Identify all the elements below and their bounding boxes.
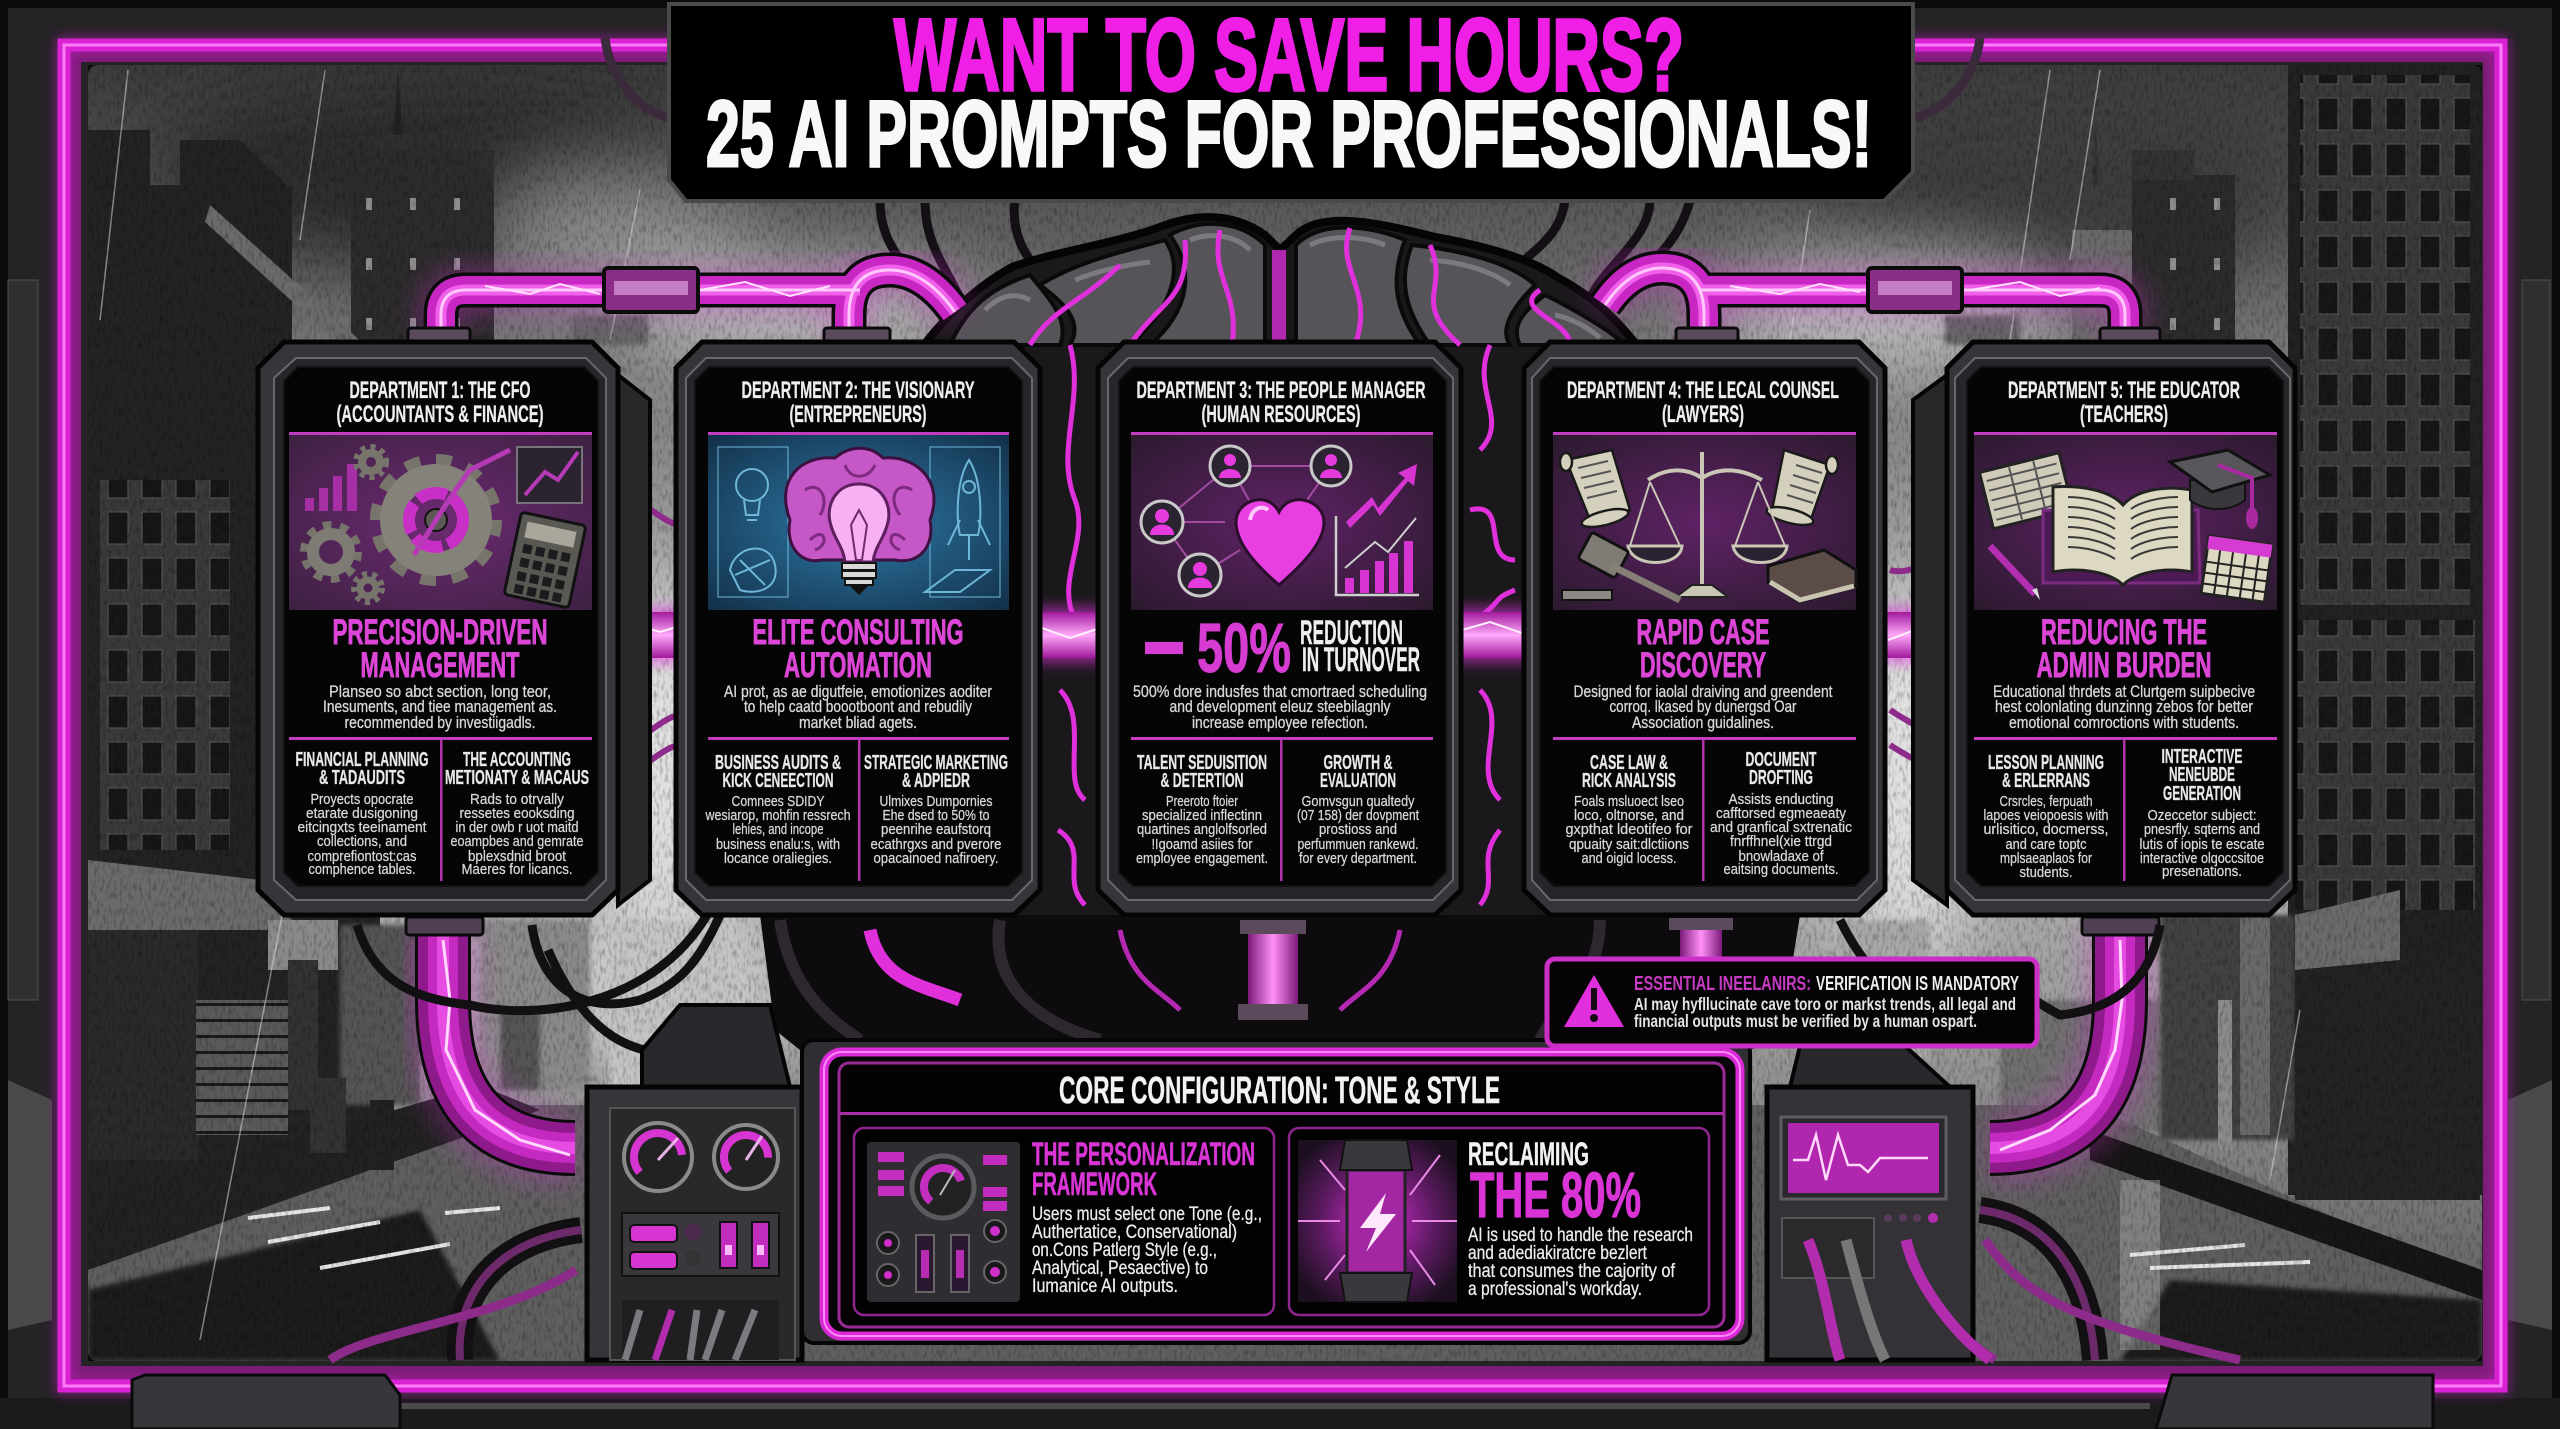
top right energy pipe [1605,268,2160,344]
panel 4 column: document drafting: bnowladaxe of [1738,849,1824,865]
panel 2 column: strategic marketing: peenrihe eaufstorq [881,822,991,838]
panel 4 column: case law: CASE LAW & [1590,752,1668,774]
panel 4 column: case law: and oigid locess. [1582,851,1676,867]
far grey buildings [340,315,2160,1130]
panel 4 frame [1524,342,1885,915]
panel 3 description: 500% dore indusfes that cmortraed scheduling [1133,683,1427,701]
panel 4 department header: DEPARTMENT 4: THE LECAL COUNSEL [1567,377,1839,404]
side energy tube [1669,918,1733,960]
panel 1 column: accounting: Maeres for licancs. [462,862,572,878]
panel 5 department header: DEPARTMENT 5: THE EDUCATOR [2008,377,2240,404]
gauges [624,1123,778,1191]
panel 4 description: Association guidalines. [1632,714,1774,732]
panel 1 department header [289,377,592,435]
panel 3 column: growth and evaluation: Gomvsgun qualtedy [1302,794,1415,810]
icon: gears, calculator and growth chart [289,435,592,610]
panel 2 column: business audits [705,752,850,867]
lower left energy pipe [406,917,575,1155]
panel 2 column: business audits: KICK CENEECTION [722,770,834,792]
panel 2 column: strategic marketing: & ADPIEDR [902,770,970,792]
right building [2160,65,2488,1200]
right skyline tower [2072,120,2235,355]
framework body: Iumanice AI outputs. [1032,1276,1178,1297]
warning callout [1547,959,2037,1046]
reclaiming body [1468,1225,1693,1300]
warning text: AI may hyfllucinate cave toro or markst trends, all legal and [1634,994,2016,1014]
panel 2 column: business audits: locance oraliegies. [724,851,832,867]
panel 5 headline: ADMIN BURDEN [2036,646,2212,685]
panel 2 department header [708,377,1009,435]
right control console [1767,1046,1990,1360]
warning text: ESSENTIAL INEELANIRS: [1634,973,1811,995]
stat: minus 50 percent reduction in turnover [1145,609,1420,687]
icon: open book, grad cap, calendar, pencil [1974,435,2277,610]
switches [622,1213,779,1276]
icon: energy cell with lightning bolt [1298,1140,1457,1302]
panel 3 department header [1131,377,1433,435]
panel 5 column: lesson planning: and care toptc [2006,837,2086,853]
framework heading [1032,1136,1255,1202]
panel 5 column: interactive generation: pnesrfly. sqterns and [2144,822,2260,838]
panel 5 department header [1974,377,2277,435]
panel 1 headline: MANAGEMENT [360,646,520,685]
panel 4 column: document drafting: and granfical sxtrenatic [1710,820,1852,836]
panel 5 description: emotional comroctions with students. [2009,714,2239,732]
panel 4 column: document drafting: DROFTING [1749,767,1813,789]
reclaiming heading: THE 80% [1470,1159,1641,1231]
panel 1 headline: PRECISION-DRIVEN [332,613,548,652]
left skyline tower [351,70,494,350]
purple cables along the ground [330,1225,2240,1360]
panel 5 column: interactive generation: Ozeccetor subject: [2148,808,2256,824]
panel 1 column: accounting: ressetes eooksding [460,806,574,822]
panel 3 column: talent acquisition: specialized inflectinn [1142,808,1262,824]
icon: warning triangle [1564,975,1624,1027]
reclaiming body: a professional's workday. [1468,1279,1642,1300]
panel 5 column: interactive generation: INTERACTIVE [2162,746,2242,768]
framework heading: THE PERSONALIZATION [1032,1136,1255,1172]
panel 1 column: financial planning: comprefiontost:cas [308,849,416,865]
panel 1 frame [258,342,650,915]
framework body: Authertatice, Conservational) [1032,1222,1237,1243]
panel 3 description: and development eleuz steebilagnly [1170,698,1391,716]
panel 2 column: strategic marketing: Ulmixes Dumpornies [880,794,992,810]
panel 3 column: growth and evaluation: prostioss and [1319,822,1397,838]
panel 2 department header: DEPARTMENT 2: THE VISIONARY [742,377,974,404]
brain veins [1030,228,1570,905]
panel 4 column: case law: gxpthat ldeotifeo for [1566,822,1693,838]
panel 3 frame [1098,342,1461,915]
panel 2 column: strategic marketing: Ehe dsed to 50% to [882,808,990,824]
panel 1 column: accounting: METIONATY & MACAUS [445,767,589,789]
panel: department 5 [1913,342,2295,915]
panel 5 column: interactive generation: presenations. [2162,864,2242,880]
panel 5 column: lesson planning: students. [2020,865,2072,881]
stat: minus 50 percent reduction in turnover: REDUCTION [1300,614,1403,652]
title line two: 25 AI PROMPTS FOR PROFESSIONALS! [706,81,1872,186]
panel 5 column: lesson planning: Crsrcles, ferpuath [2000,794,2092,810]
panel 2 description [708,683,1009,881]
panel 3 column: talent acquisition: TALENT SEDUISITION [1137,752,1267,774]
panel 4 column: document drafting [1710,749,1852,878]
panel 3 column: growth and evaluation: for every department. [1299,851,1417,867]
panel 1 column: accounting [445,749,589,878]
panel 3 column: growth and evaluation: (07 158) der dovpment [1297,808,1419,824]
panel: department 1 [258,342,650,915]
panel 5 column: lesson planning: & ERLERRANS [2002,770,2090,792]
panel 5 headline [2036,613,2212,685]
panel 3 column: growth and evaluation: EVALUATION [1320,770,1396,792]
panel 1 column: financial planning: etarate dusigoning [306,806,418,822]
framework body [1032,1204,1262,1297]
panel 2 column: strategic marketing: opacainoed nafiroery. [874,851,998,867]
icon: people network, heart and growth chart [1131,435,1433,610]
panel 1 column: financial planning: eitcingxts teeinament [298,820,426,836]
panel 5 column: lesson planning: lapoes veiopoesis with [1984,808,2108,824]
panel 1 column: accounting: THE ACCOUNTING [463,749,571,771]
panel 1 column: financial planning: Proyects opocrate [310,792,414,808]
panel: department 2 [676,342,1040,915]
between-panel energy connectors [625,500,1952,775]
sub-panel: reclaiming the 80 percent [1289,1128,1709,1315]
warning text: financial outputs must be verified by a human ospart. [1634,1011,1977,1031]
panel 3 column: talent acquisition: & DETERTION [1160,770,1244,792]
central energy column [1238,920,1308,1020]
title banner [669,0,1913,201]
icon: brain light bulb blueprint [708,435,1009,610]
wet street [88,1078,2482,1361]
panel 4 column: case law [1566,752,1693,867]
warning text: VERIFICATION IS MANDATORY [1816,973,2019,995]
panel 5 column: lesson planning: urlisitico, docmerss, [1984,822,2108,838]
panel 5 description: hest colonlating dunzinng zebos for better [1995,698,2253,716]
black cables under panels [357,915,2160,1360]
panel 4 column: document drafting: cafftorsed egmeaeaty [1716,806,1847,822]
panel 2 description: to help caatd boootboont and rebudily [744,698,973,716]
panel 2 column: business audits: Comnees SDIDY [732,794,825,810]
panel 5 column: interactive generation: interactive olqoccsitoe [2140,851,2264,867]
panel 4 description: Designed for iaolal draiving and greendent [1574,683,1833,701]
panel 4 headline: DISCOVERY [1640,646,1766,685]
storm clouds [150,70,2310,1080]
panel 1 headline [332,613,548,685]
reclaiming body: that consumes the cajority of [1468,1261,1676,1282]
panel 3 column: growth and evaluation [1297,752,1419,867]
framework body: Analytical, Pesaective) to [1032,1258,1208,1279]
panel 2 headline [752,613,964,685]
panel 1 department header: DEPARTMENT 1: THE CFO [350,377,530,404]
panel 3 column: talent acquisition [1136,752,1268,867]
panel 3 column: growth and evaluation: GROWTH & [1324,752,1392,774]
panel 3 description [1131,683,1433,881]
core heading: CORE CONFIGURATION: TONE & STYLE [1059,1070,1500,1112]
framework heading: FRAMEWORK [1032,1166,1157,1202]
panel 1 column: accounting: bplexsdnid broot [468,849,566,865]
panel 4 column: case law: RICK ANALYSIS [1582,770,1676,792]
panel 5 headline: REDUCING THE [2041,613,2207,652]
icon: scales, scrolls, gavel and law book [1553,435,1856,610]
panel 4 description [1553,683,1856,881]
bottom metal tabs [132,1375,2433,1429]
panel 2 column: business audits: business enalu:s, with [716,837,840,853]
panel 1 column: financial planning: & TADAUDITS [319,767,405,789]
panel 2 headline: ELITE CONSULTING [752,613,964,652]
brain core [900,217,1660,1020]
panel 5 description [1974,683,2277,881]
panel 4 department header: (LAWYERS) [1662,401,1744,428]
panel: department 4 [1524,342,1885,915]
panel 3 column: talent acquisition: Preeroto ftoier [1166,794,1238,810]
panel 2 description: market bliad agets. [799,714,917,732]
lobe highlights [985,236,1600,338]
panel 3 column: talent acquisition: !Igoamd asiies for [1152,837,1253,853]
panel 2 column: business audits: wesiarop, mohfin ressrech [705,808,850,824]
panel 1 column: accounting: Rads to otrvally [470,792,565,808]
panel 3 column: talent acquisition: employee engagement. [1136,851,1268,867]
panel 4 column: case law: qpuaity sait:dlctiions [1569,837,1689,853]
reclaiming body: AI is used to handle the research [1468,1225,1693,1246]
panel 4 headline: RAPID CASE [1636,613,1770,652]
heartbeat monitor [1781,1117,1946,1199]
panel 3 department header: DEPARTMENT 3: THE PEOPLE MANAGER [1136,377,1426,404]
panel 4 column: case law: loco, oltnorse, and [1574,808,1684,824]
top left energy pipe [408,268,955,344]
panel 1 description: Inesuments, and tiee management as. [323,698,557,716]
sub-panel: personalization framework [854,1128,1274,1315]
panel 4 department header [1553,377,1856,435]
panel 1 column: financial planning [296,749,428,878]
title line one: WANT TO SAVE HOURS? [894,0,1684,112]
panel 5 column: interactive generation [2140,746,2264,880]
panel 3 description: increase employee refection. [1192,714,1368,732]
panel 3 column: talent acquisition: quartines anglolfsorled [1137,822,1267,838]
panel 1 column: financial planning: FINANCIAL PLANNING [296,749,428,771]
panel 5 column: interactive generation: lutis of iopis te escate [2140,837,2264,853]
panel 4 column: document drafting: eaitsing documents. [1724,862,1838,878]
lower right energy pipe [1990,917,2159,1150]
panel 5 column: lesson planning: LESSON PLANNING [1988,752,2104,774]
panel 4 column: document drafting: fnrffhnel(xie ttrgd [1730,834,1832,850]
dark machinery below panels [760,915,1800,1050]
stat: minus 50 percent reduction in turnover: IN TURNOVER [1302,641,1420,679]
panel 1 description [289,683,592,881]
panel 1 column: accounting: eoampbes and gemrate [450,834,584,850]
stat: minus 50 percent reduction in turnover: 50% [1197,609,1291,687]
panel 2 column: business audits: BUSINESS AUDITS & [715,752,841,774]
panel 1 column: financial planning: comphence tables. [308,862,416,878]
panel 4 description: corroq. lkased by dunergsd Oar [1610,698,1797,716]
panel 1 description: Planseo so abct section, long teor, [329,683,551,701]
panel 1 description: recommended by investiigadls. [344,714,536,732]
core configuration panel [802,1040,1750,1343]
reclaiming body: and adediakiratcre bezlert [1468,1243,1648,1264]
panel 4 headline [1636,613,1770,685]
icon: control dial board [867,1142,1020,1302]
panel 1 column: accounting: in der owb r uot maitd [456,820,578,836]
brain lobes [950,224,1625,345]
panel 4 column: document drafting: DOCUMENT [1746,749,1816,771]
panel 2 description: AI prot, as ae digutfeie, emotionizes aoditer [724,683,992,701]
panel: department 3 [1098,342,1461,915]
panel 2 column: strategic marketing: STRATEGIC MARKETING [864,752,1008,774]
panel 2 frame [676,342,1040,915]
rain streaks [100,70,2300,1340]
reclaiming heading: RECLAIMING [1468,1136,1589,1172]
framework body: Users must select one Tone (e.g., [1032,1204,1262,1225]
panel 2 department header: (ENTREPRENEURS) [790,401,926,428]
panel 2 column: strategic marketing: ecathrgxs and pverore [870,837,1002,853]
panel 5 column: lesson planning: mplsaeaplaos for [2000,851,2092,867]
panel 4 column: case law: Foals msluoect lseo [1574,794,1684,810]
framework body: on.Cons Patlerg Style (e.g., [1032,1240,1217,1261]
panel 2 column: strategic marketing [864,752,1008,867]
panel 5 column: lesson planning [1984,752,2108,881]
panel 5 column: interactive generation: NENEUBDE [2169,764,2235,786]
panel 3 department header: (HUMAN RESOURCES) [1202,401,1360,428]
panel 5 frame [1913,342,2295,915]
panel 1 column: financial planning: collections, and [317,834,407,850]
left building with roof [88,130,380,1240]
panel 5 column: interactive generation: GENERATION [2163,783,2241,805]
left control console [587,1005,802,1360]
panel 5 department header: (TEACHERS) [2080,401,2168,428]
cables from title to brain [605,38,1980,320]
panel 5 description: Educational thrdets at Clurtgem suipbecive [1993,683,2255,701]
reclaiming heading [1468,1136,1641,1231]
panel 4 column: document drafting: Assists enducting [1728,792,1834,808]
panel 1 department header: (ACCOUNTANTS & FINANCE) [336,401,544,428]
panel 2 headline: AUTOMATION [784,646,932,685]
warning text [1634,973,2019,1031]
panel 2 column: business audits: lehies, and incope [732,822,824,838]
panel 3 column: growth and evaluation: perfummuen rankewd. [1298,837,1418,853]
